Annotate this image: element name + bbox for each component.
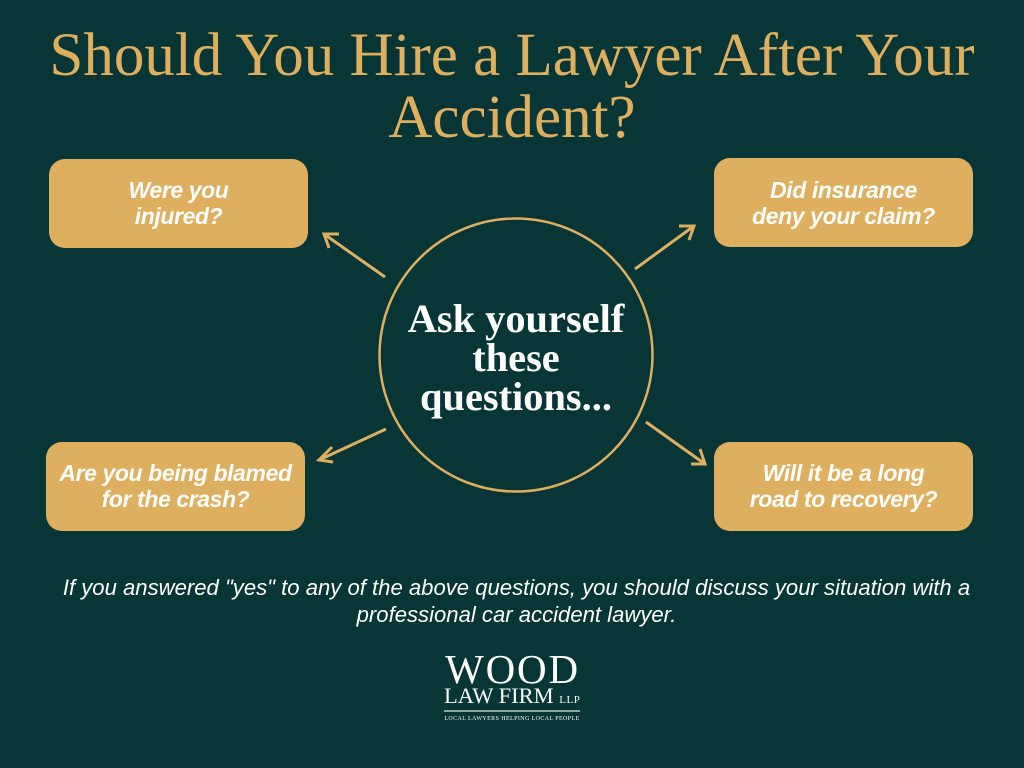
arrow: lower left (316, 428, 387, 464)
panel: long road to recovery: Will it be a long (763, 460, 924, 486)
circle text: questions... (420, 374, 612, 419)
panel: are you being blamed (46, 442, 305, 531)
arrow: lower right (645, 420, 707, 466)
title: Should You Hire a Lawyer After Your (49, 22, 975, 89)
panel: are you being blamed: for the crash? (102, 486, 249, 512)
closing text (63, 575, 970, 627)
logo: tagline: LOCAL LAWYERS HELPING LOCAL PEOPLE (444, 716, 580, 722)
panel: were you injured: Were you (129, 177, 228, 203)
logo (444, 646, 580, 722)
closing text: If you answered "yes" to any of the above questions, you should discuss your situation with a (63, 575, 970, 600)
panel: were you injured: injured? (135, 203, 222, 229)
panel: are you being blamed: Are you being blamed (59, 460, 292, 486)
panel: long road to recovery (714, 442, 973, 531)
arrow: upper left (322, 232, 386, 278)
arrow: upper right (634, 224, 696, 270)
circle text: these (472, 335, 560, 380)
panel: were you injured (49, 159, 308, 248)
logo: divider (444, 710, 580, 712)
panel: did insurance deny your claim (714, 158, 973, 247)
central circle (378, 217, 654, 493)
panel: did insurance deny your claim: Did insurance (770, 177, 917, 203)
logo: wood: WOOD (445, 646, 580, 692)
panel: did insurance deny your claim: deny your claim? (752, 203, 935, 229)
title (49, 22, 975, 151)
panel: long road to recovery: road to recovery? (750, 486, 937, 512)
circle text: Ask yourself (408, 296, 624, 341)
closing text: professional car accident lawyer. (357, 602, 676, 627)
title: Accident? (388, 84, 636, 151)
circle text (408, 296, 625, 419)
logo: law firm: LAW FIRM LLP (444, 683, 580, 708)
